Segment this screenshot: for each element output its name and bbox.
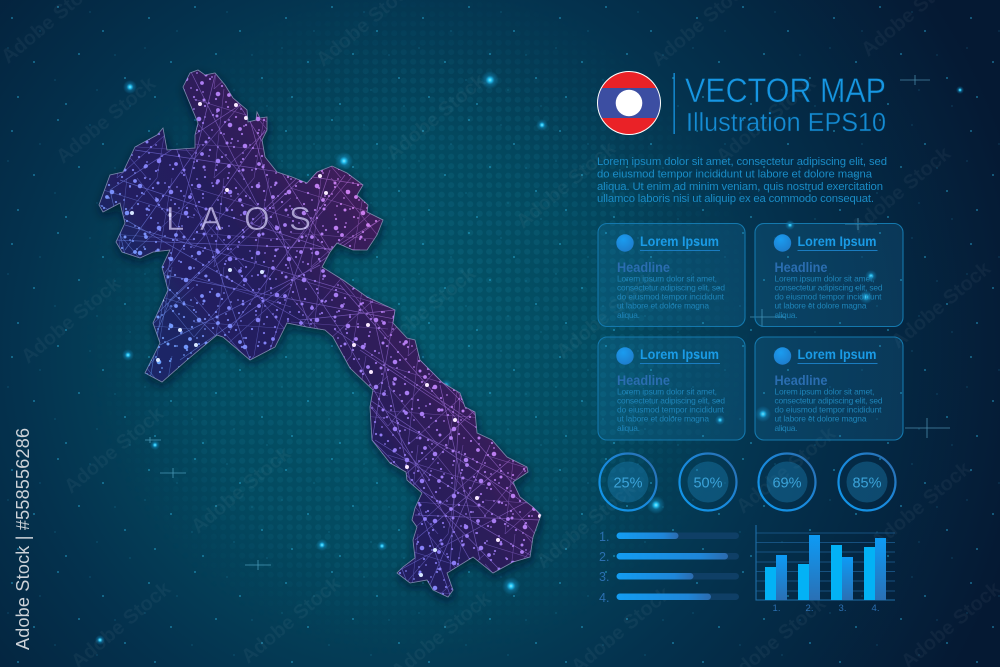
panel: card 3: Headline <box>617 372 670 388</box>
stock id label: Adobe Stock | #558556286 <box>13 428 33 650</box>
panel: card 2: do eiusmod tempor incididunt <box>774 292 882 302</box>
intro paragraph: Lorem ipsum dolor sit amet, consectetur adipiscing elit, sed <box>597 156 887 168</box>
watermark: Adobe Stock <box>847 142 956 238</box>
bar chart <box>756 525 895 614</box>
watermark: Adobe Stock <box>887 257 996 353</box>
intro paragraph <box>597 156 887 205</box>
horizontal progress bars: 1. <box>599 530 609 544</box>
panel: card 2 <box>755 224 903 326</box>
panel: card 2: ut labore et dolore magna <box>774 300 867 310</box>
watermark: Adobe Stock <box>60 402 169 498</box>
panel: card 2: consectetur adipiscing elit, sed <box>774 282 883 292</box>
panel: card 3 <box>598 337 745 440</box>
bar chart: 1. <box>773 603 780 614</box>
gauge: 85% <box>838 454 896 510</box>
gauge: 69%: 69% <box>772 476 802 492</box>
title: Illustration EPS10 <box>686 109 886 137</box>
panel: card 4: ut labore et dolore magna <box>774 414 867 424</box>
title: VECTOR MAP <box>685 72 886 110</box>
watermark: Adobe Stock <box>382 69 491 165</box>
gauge: 25%: 25% <box>613 476 643 492</box>
intro paragraph: do eiusmod tempor incididunt ut labore et dolore magna <box>597 168 873 180</box>
watermark: Adobe Stock <box>237 572 346 667</box>
panel: card 4: aliqua. <box>774 423 798 433</box>
horizontal progress bars: 4. <box>599 591 609 605</box>
panel: card 3: aliqua. <box>617 423 640 433</box>
watermark: Adobe Stock <box>867 457 976 553</box>
watermark: Adobe Stock <box>187 442 296 538</box>
panel: card 1: ut labore et dolore magna <box>617 300 709 310</box>
panel: card 2: Lorem ipsum dolor sit amet, <box>774 274 874 284</box>
horizontal progress bars: 3. <box>599 570 609 584</box>
map of Laos <box>96 70 546 604</box>
panel: card 1: Headline <box>617 259 670 275</box>
panel: card 3: consectetur adipiscing elit, sed <box>617 396 725 406</box>
gauge: 50%: 50% <box>693 476 723 492</box>
panel: card 2: Headline <box>774 259 828 275</box>
horizontal progress bars <box>599 530 739 605</box>
intro paragraph: aliqua. Ut enim ad minim veniam, quis nostrud exercitation <box>597 181 883 193</box>
panel: card 1: aliqua. <box>617 310 640 320</box>
gauge: 85%: 85% <box>852 476 882 492</box>
watermark: Adobe Stock <box>552 267 661 363</box>
title <box>674 72 886 137</box>
map label: LAOS: LAOS <box>166 200 311 237</box>
bar chart: 2. <box>806 603 813 614</box>
panel: card 3: Lorem ipsum dolor sit amet, <box>617 386 717 396</box>
panel: card 4: Lorem Ipsum <box>798 347 876 362</box>
panel: card 1: do eiusmod tempor incididunt <box>617 292 725 302</box>
horizontal progress bars: 2. <box>599 550 609 564</box>
watermark: Adobe Stock <box>52 72 161 168</box>
bar chart: 4. <box>872 603 879 614</box>
panel: card 3: ut labore et dolore magna <box>617 414 709 424</box>
gauge: 69% <box>758 454 816 510</box>
watermark: Adobe Stock <box>732 422 841 518</box>
watermark: Adobe Stock <box>712 72 821 168</box>
panel: card 4: Lorem ipsum dolor sit amet, <box>774 386 874 396</box>
watermark: Adobe Stock <box>532 477 641 573</box>
panel: card 2: Lorem Ipsum <box>798 234 876 249</box>
panel: card 1: Lorem ipsum dolor sit amet, <box>617 274 717 284</box>
panel: card 1 <box>598 224 745 326</box>
bar chart: 3. <box>839 603 846 614</box>
watermark: Adobe Stock <box>512 137 621 233</box>
panel: card 3: do eiusmod tempor incididunt <box>617 404 725 414</box>
gauge: 50% <box>680 454 736 510</box>
flag of Laos <box>597 70 661 136</box>
panel: card 4 <box>755 337 903 440</box>
watermark: Adobe Stock <box>372 262 481 358</box>
panel: card 4: Headline <box>774 372 828 388</box>
panel: card 4: consectetur adipiscing elit, sed <box>774 396 883 406</box>
panel: card 1: consectetur adipiscing elit, sed <box>617 282 725 292</box>
watermark: Adobe Stock <box>17 272 126 368</box>
panel: card 3: Lorem Ipsum <box>640 347 719 362</box>
panel: card 1: Lorem Ipsum <box>640 234 719 249</box>
panel: card 4: do eiusmod tempor incididunt <box>774 404 882 414</box>
gauge: 25% <box>600 454 656 510</box>
panel: card 2: aliqua. <box>774 310 798 320</box>
intro paragraph: ullamco laboris nisi ut aliquip ex ea commodo consequat. <box>597 193 874 205</box>
